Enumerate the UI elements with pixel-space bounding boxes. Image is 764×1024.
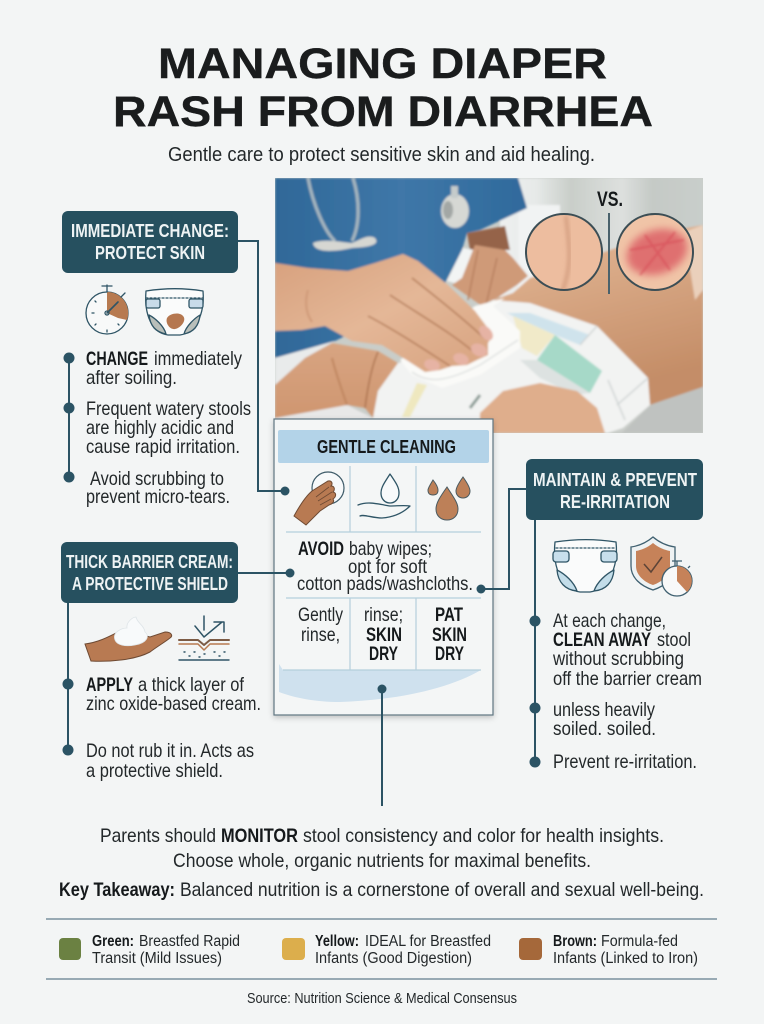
- heading: thick barrier cream: A PROTECTIVE SHIELD: [72, 574, 228, 594]
- diaper: [373, 300, 650, 433]
- text: avoid baby wipes: baby wipes;: [349, 538, 432, 560]
- text: apply cream: APPLY: [86, 674, 133, 696]
- text: frequent watery stools: Frequent watery stools: [86, 398, 251, 420]
- legend item: green: Green:: [92, 933, 134, 950]
- legend item: green: Breastfed Rapid: [139, 933, 240, 950]
- text: do not rub: [86, 740, 254, 782]
- text: rinse skin dry: DRY: [369, 643, 398, 665]
- title: MANAGING DIAPER: [158, 40, 607, 88]
- icon: clean diaper: [553, 540, 617, 592]
- heading: gentle cleaning: [278, 430, 489, 463]
- heading: thick barrier cream: [61, 542, 238, 603]
- icon: stopwatch: [86, 285, 128, 334]
- panel: immediate change: [62, 211, 251, 508]
- legend item: brown: Brown:: [553, 933, 597, 950]
- text: unless heavily soiled: [553, 699, 656, 740]
- text: clean away stool: without scrubbing: [552, 648, 684, 670]
- source line: Source: Nutrition Science & Medical Consensus: [247, 990, 517, 1007]
- text: apply cream: zinc oxide-based cream.: [86, 693, 261, 715]
- legend item: green: [59, 933, 240, 967]
- text: clean away stool: CLEAN AWAY: [553, 629, 651, 651]
- panel: maintain and prevent: [526, 459, 703, 773]
- panel: gentle cleaning card: [274, 419, 493, 715]
- text: avoid scrubbing: Avoid scrubbing to: [90, 468, 224, 490]
- nurse hand: [275, 254, 493, 372]
- text: rinse skin dry: [364, 604, 403, 665]
- text: monitoring and key takeaway: Key Takeaway:: [59, 879, 175, 901]
- text: change immediately: immediately: [154, 348, 242, 370]
- cotton pad: [400, 298, 520, 388]
- text: monitoring and key takeaway: [59, 825, 704, 901]
- text: monitoring and key takeaway: MONITOR: [221, 825, 298, 847]
- icon: skin barrier layers: [179, 616, 229, 660]
- subtitle: Gentle care to protect sensitive skin and aid healing.: [168, 144, 595, 166]
- text: clean away stool: stool: [657, 629, 691, 651]
- legend item: yellow: Infants (Good Digestion): [315, 950, 472, 967]
- text: pat skin dry: [432, 604, 467, 665]
- panel: thick barrier cream: [61, 542, 261, 782]
- text: apply cream: [86, 674, 261, 715]
- icon: healthy vs rash comparison circles: VS.: [597, 188, 623, 211]
- icon: hand with cotton pad: [294, 472, 344, 525]
- text: avoid scrubbing: prevent micro-tears.: [86, 486, 230, 508]
- belly: [493, 225, 703, 405]
- text: gently rinse: [298, 604, 343, 646]
- legend item: yellow: [282, 933, 491, 967]
- text: monitoring and key takeaway: stool consistency and color for health insights.: [303, 825, 664, 847]
- text: monitoring and key takeaway: Balanced nutrition is a cornerstone of overall and sexual well-being.: [180, 879, 704, 901]
- stethoscope: [308, 178, 358, 241]
- right thigh: [480, 383, 605, 433]
- heading: gentle cleaning: GENTLE CLEANING: [317, 437, 456, 457]
- text: unless heavily soiled: soiled. soiled.: [553, 718, 656, 740]
- text: avoid baby wipes: cotton pads/washcloths.: [297, 573, 473, 595]
- text: frequent watery stools: cause rapid irritation.: [86, 436, 240, 458]
- title: RASH FROM DIARRHEA: [113, 88, 653, 136]
- legend item: yellow: IDEAL for Breastfed: [365, 933, 491, 950]
- legend item: brown: [519, 933, 698, 967]
- text: clean away stool: At each change,: [553, 610, 666, 632]
- heading: immediate change: [62, 211, 238, 273]
- text: clean away stool: [552, 610, 702, 690]
- text: prevent re-irritation: Prevent re-irritation.: [553, 751, 697, 773]
- text: frequent watery stools: [86, 398, 251, 458]
- text: change immediately: after soiling.: [86, 367, 177, 389]
- text: change immediately: CHANGE: [86, 348, 148, 370]
- text: avoid baby wipes: AVOID: [298, 538, 344, 560]
- icon: hand with cream: [85, 617, 172, 661]
- text: rinse skin dry: rinse;: [364, 604, 403, 626]
- sheets: [622, 387, 703, 433]
- heading: maintain and prevent: [526, 459, 703, 520]
- text: pat skin dry: PAT: [435, 604, 463, 626]
- heading: immediate change: IMMEDIATE CHANGE:: [71, 221, 229, 241]
- text: change immediately: [86, 348, 242, 389]
- text: monitoring and key takeaway: Choose whole, organic nutrients for maximal benefits.: [173, 850, 591, 872]
- legend item: brown: Formula-fed: [601, 933, 678, 950]
- title: [113, 40, 653, 136]
- text: do not rub: Do not rub it in. Acts as: [86, 740, 254, 762]
- connector lines and bullet dots: [62, 241, 540, 806]
- text: avoid baby wipes: [297, 538, 473, 595]
- icon: water drop over hand: [358, 474, 410, 518]
- legend item: brown: Infants (Linked to Iron): [553, 950, 698, 967]
- text: gently rinse: Gently: [298, 604, 343, 626]
- icon: brown drops: [428, 477, 470, 520]
- text: pat skin dry: DRY: [435, 643, 464, 665]
- heading: maintain and prevent: MAINTAIN & PREVENT: [533, 470, 697, 490]
- left thigh: [275, 343, 398, 418]
- text: do not rub: a protective shield.: [86, 760, 223, 782]
- photo: nurse changing baby diaper: [275, 178, 703, 433]
- text: pat skin dry: SKIN: [432, 624, 467, 646]
- text: clean away stool: off the barrier cream: [553, 668, 702, 690]
- text: rinse skin dry: SKIN: [366, 624, 402, 646]
- legend: [46, 919, 717, 979]
- heading: thick barrier cream: THICK BARRIER CREAM:: [66, 552, 233, 572]
- scrubs: [275, 178, 527, 358]
- text: gently rinse: rinse,: [301, 624, 340, 646]
- text: avoid baby wipes: opt for soft: [348, 556, 427, 578]
- text: monitoring and key takeaway: Parents should: [100, 825, 216, 847]
- text: unless heavily soiled: unless heavily: [553, 699, 655, 721]
- legend item: green: Transit (Mild Issues): [92, 950, 222, 967]
- second hand: [452, 245, 528, 306]
- text: frequent watery stools: are highly acidic and: [86, 417, 234, 439]
- grid: [283, 466, 481, 670]
- heading: immediate change: PROTECT SKIN: [95, 243, 205, 263]
- icon: soiled diaper: [146, 289, 203, 335]
- swoosh: [279, 664, 481, 702]
- legend item: yellow: Yellow:: [315, 933, 359, 950]
- heading: maintain and prevent: RE-IRRITATION: [560, 492, 670, 512]
- icon: shield with stopwatch: [631, 537, 692, 596]
- text: apply cream: a thick layer of: [138, 674, 244, 696]
- icon: healthy vs rash comparison circles: [525, 192, 694, 294]
- text: avoid scrubbing: [86, 468, 230, 508]
